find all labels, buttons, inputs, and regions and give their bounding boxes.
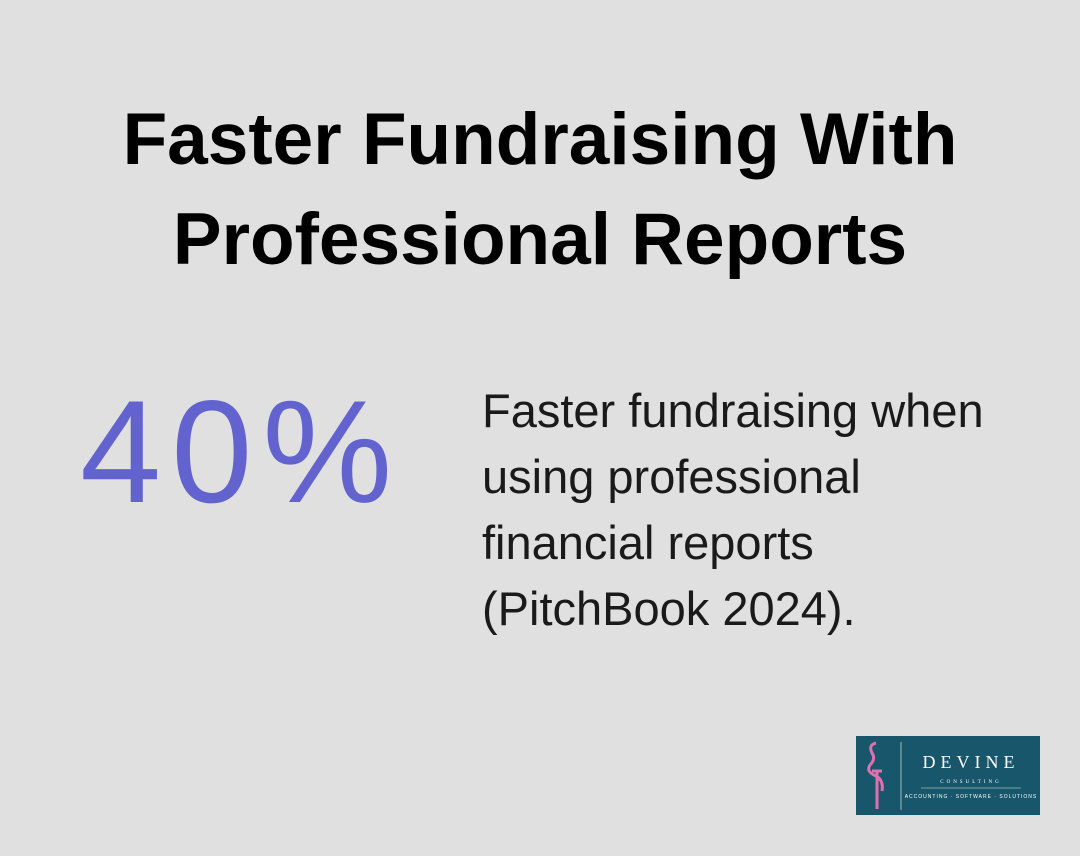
big statistic: 40%: [80, 370, 402, 533]
title: [123, 99, 957, 280]
description text: [482, 384, 984, 635]
brand name: [905, 752, 1037, 800]
description text: (PitchBook 2024).: [482, 582, 856, 635]
title: Faster Fundraising With: [123, 99, 957, 180]
description text: using professional: [482, 450, 861, 503]
title: Professional Reports: [173, 199, 907, 280]
icon: flamingo: [869, 743, 882, 809]
logo: Devine Consulting: [856, 736, 1040, 815]
description text: Faster fundraising when: [482, 384, 984, 437]
brand name: ACCOUNTING · SOFTWARE · SOLUTIONS: [905, 794, 1037, 800]
brand name: DEVINE: [923, 752, 1019, 772]
brand name: CONSULTING: [940, 780, 1002, 785]
description text: financial reports: [482, 516, 814, 569]
